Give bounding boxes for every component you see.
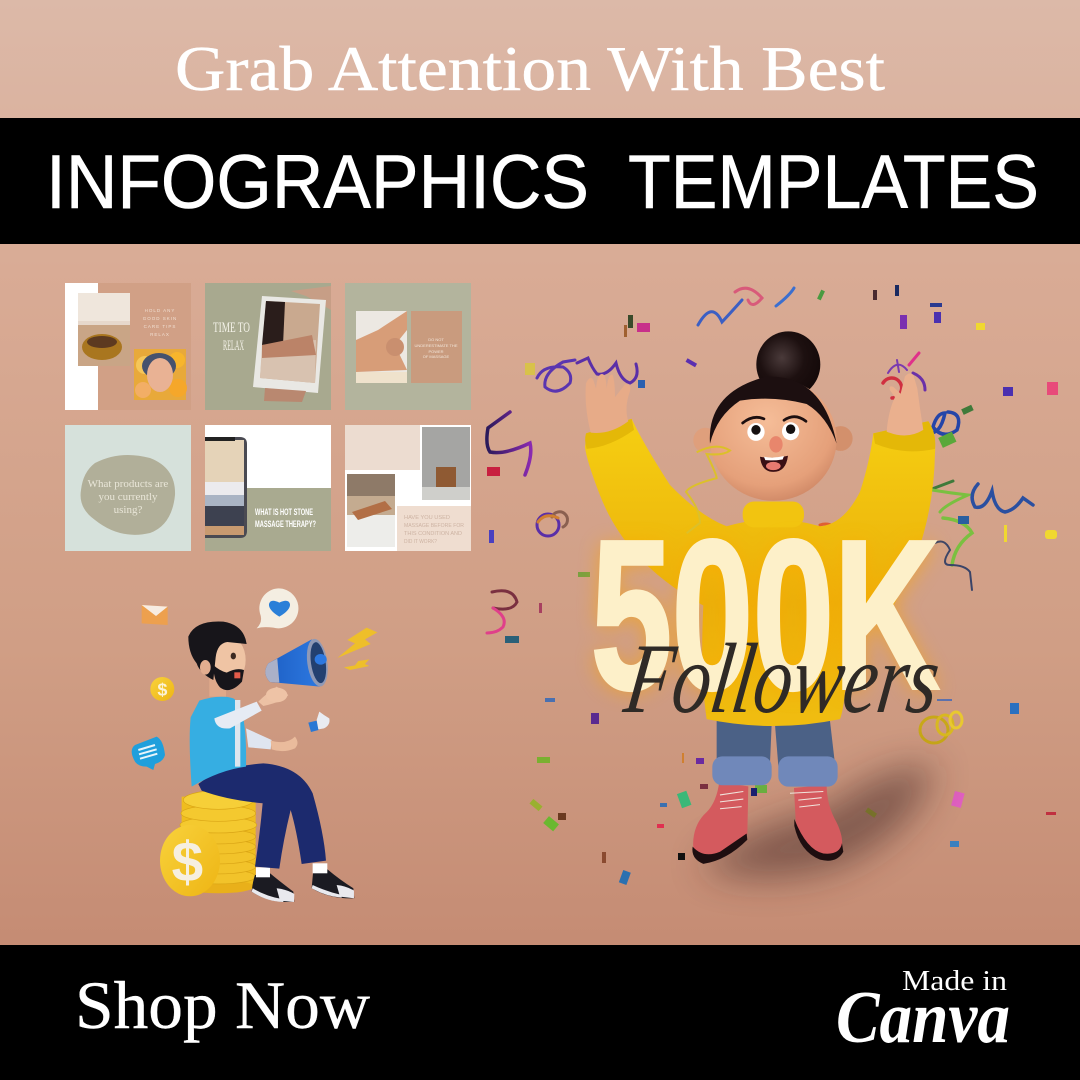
thumbnail 6: collage bbox=[345, 425, 471, 551]
panel: template thumbnails bbox=[65, 283, 471, 551]
illustration: man with megaphone on coins bbox=[132, 588, 377, 902]
shirt bbox=[190, 697, 246, 787]
confetti ribbons bbox=[487, 288, 1033, 743]
big dollar coin: $ bbox=[172, 832, 203, 895]
thumbnail 3: massage bbox=[345, 283, 471, 410]
icon: envelope bbox=[142, 605, 168, 625]
thumbnail 5: hot stone: MASSAGE THERAPY? bbox=[255, 519, 316, 529]
coin stack bbox=[180, 791, 257, 893]
thumbnail 4: question card: you currently bbox=[99, 491, 158, 503]
thumbnail 1: spa layout bbox=[65, 283, 191, 410]
thumbnail 3: massage: POWER bbox=[428, 349, 444, 354]
thumbnail 6: collage: DID IT WORK? bbox=[404, 539, 437, 545]
thumbnail 3: massage: UNDERESTIMATE THE bbox=[415, 343, 458, 348]
yellow streamer bbox=[686, 447, 730, 533]
ground shadow bbox=[700, 765, 935, 878]
boots bbox=[692, 782, 843, 864]
thumbnail 4: question card: What products are bbox=[88, 478, 168, 490]
thumbnail 2: time to relax: TIME TO bbox=[213, 320, 250, 336]
script label: followers: Followers bbox=[618, 622, 947, 734]
confetti pieces bbox=[487, 285, 1058, 885]
trousers bbox=[198, 763, 326, 869]
illustration: woman celebrating bbox=[585, 331, 935, 864]
bun bbox=[756, 331, 820, 398]
big dollar coin bbox=[160, 825, 220, 896]
shorts bbox=[712, 721, 838, 787]
thumbnail 5: hot stone: WHAT IS HOT STONE bbox=[255, 507, 313, 517]
icon: dollar coin: $ bbox=[157, 679, 167, 699]
thumbnail 5: hot stone bbox=[205, 425, 331, 551]
thumbnail 4: question card: using? bbox=[114, 504, 142, 516]
thumbnail 2: time to relax bbox=[205, 283, 331, 410]
call to action: shop now: Shop Now bbox=[75, 967, 370, 1043]
title banner: INFOGRAPHICS bbox=[46, 140, 589, 225]
thumbnail 1: spa layout: GOOD SKIN bbox=[143, 316, 177, 321]
thumbnail 4: question card bbox=[65, 425, 191, 551]
badge: made in canva: Canva bbox=[836, 977, 1010, 1059]
icon: dollar coin bbox=[150, 677, 174, 701]
thumbnail 2: time to relax: RELAX bbox=[223, 338, 244, 354]
badge: made in canva: Made in bbox=[902, 965, 1008, 997]
megaphone bbox=[265, 638, 331, 688]
shoes bbox=[252, 863, 354, 902]
icon: heart speech bubble bbox=[257, 588, 298, 628]
head bbox=[188, 622, 247, 697]
hands bbox=[586, 373, 923, 436]
icon: thumbs up bbox=[308, 712, 330, 732]
thumbnail 6: collage: THIS CONDITION AND bbox=[404, 531, 462, 537]
title banner bbox=[0, 118, 1080, 244]
thumbnail 6: collage: HAVE YOU USED bbox=[404, 515, 450, 521]
hand on megaphone bbox=[266, 688, 287, 702]
thumbnail 1: spa layout: CARE TIPS bbox=[144, 324, 176, 329]
illustration: confetti bbox=[487, 285, 1058, 885]
arms bbox=[214, 687, 297, 751]
thumbnail 3: massage: OF MASSAGE bbox=[423, 354, 450, 359]
thumbnail 1: spa layout: HOLD ANY bbox=[145, 308, 175, 313]
yellow sweater bbox=[585, 419, 935, 726]
thumbnail 6: collage: MASSAGE BEFORE FOR bbox=[404, 523, 464, 529]
icon: lightning bolts bbox=[337, 628, 377, 670]
footer banner bbox=[0, 945, 1080, 1080]
heading: grab attention: Grab Attention With Best bbox=[175, 33, 885, 104]
title banner: TEMPLATES bbox=[628, 140, 1039, 225]
icon: chat bubble bbox=[132, 737, 165, 770]
head bbox=[693, 331, 853, 501]
thumbnail 3: massage: DO NOT bbox=[428, 337, 444, 342]
thumbnail 1: spa layout: RELAX bbox=[150, 332, 170, 337]
